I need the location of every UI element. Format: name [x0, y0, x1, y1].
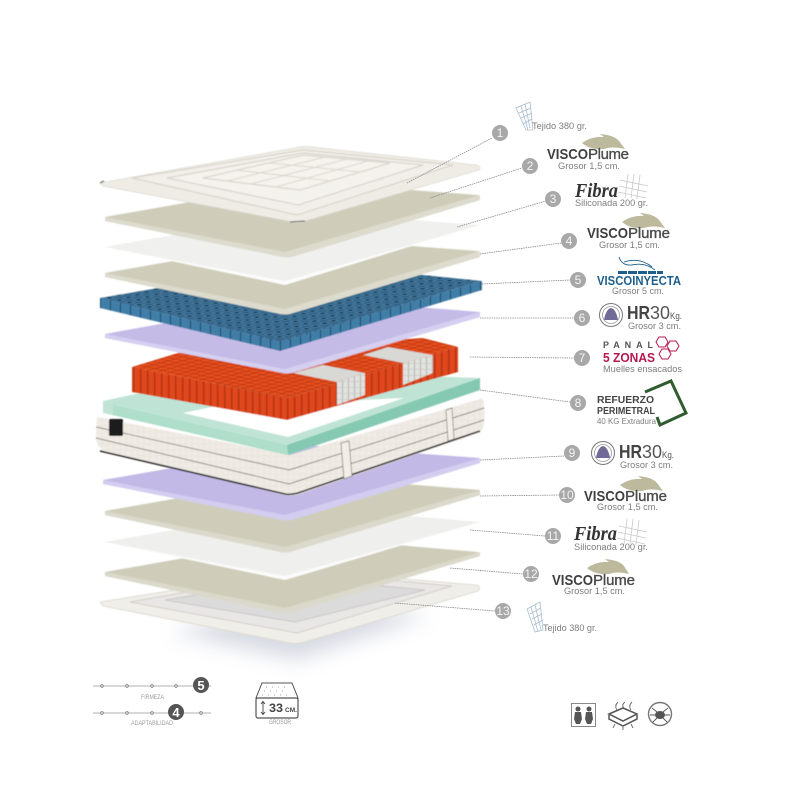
icon: visco injection	[618, 257, 663, 274]
label 3: fibra: Siliconada 200 gr.	[575, 198, 648, 209]
thickness icon: GROSOR	[269, 720, 292, 726]
thickness icon: 33	[269, 701, 283, 715]
label 4: visco plume: Plume	[628, 225, 670, 242]
label 5: visco inyecta: Grosor 5 cm.	[612, 286, 664, 297]
label 8: refuerzo perimetral: REFUERZO	[597, 394, 654, 406]
icon: fabric net	[516, 102, 533, 130]
label 3: fibra	[574, 174, 648, 209]
label 2: visco plume: VISCO	[547, 146, 588, 163]
icon: fibre grid	[618, 174, 648, 199]
label 10: visco plume: VISCO	[584, 488, 625, 505]
label 9: HR foam: Grosor 3 cm.	[620, 460, 673, 471]
icon: fibre grid	[617, 519, 647, 545]
label 13: tejido: Tejido 380 gr.	[543, 623, 597, 634]
label 7: panel 5 zonas: 5 ZONAS	[603, 350, 655, 365]
layer 5: visco injected blue grid	[100, 263, 482, 351]
label 13: tejido	[527, 602, 597, 634]
label 6: HR foam	[600, 303, 682, 332]
icon: perimeter frame	[645, 381, 686, 425]
green foam frame	[103, 372, 480, 455]
mattress body	[96, 398, 485, 496]
label 10: visco plume: Grosor 1,5 cm.	[597, 502, 658, 513]
number badges: 10	[560, 488, 574, 502]
label 9: HR foam: Kg.	[662, 450, 674, 460]
label 1: tejido	[516, 102, 587, 132]
layer 6: HR foam	[105, 298, 480, 374]
label 11: fibra: Siliconada 200 gr.	[574, 542, 648, 553]
mattress layers stack	[96, 146, 485, 660]
adaptability scale	[93, 704, 211, 727]
icon: breathable layer	[609, 702, 637, 730]
icon: anti-mite	[648, 702, 672, 726]
icon: feather	[582, 134, 625, 149]
label 8: refuerzo perimetral	[597, 381, 686, 426]
label 4: visco plume: Grosor 1,5 cm.	[599, 240, 660, 251]
layer 2: visco plume	[105, 182, 480, 258]
label 8: refuerzo perimetral: 40 KG Extradura	[597, 416, 656, 426]
label 7: panel 5 zonas	[603, 337, 682, 375]
icon: feather	[587, 559, 629, 574]
icon: feather	[620, 476, 663, 491]
label 2: visco plume	[547, 134, 629, 172]
number badges: 9	[569, 446, 576, 460]
adaptability scale: 4	[172, 705, 180, 720]
layer 10: visco plume	[105, 476, 480, 552]
icon: feather	[622, 213, 665, 228]
number badges: 11	[547, 529, 560, 543]
number badges: 7	[579, 351, 586, 365]
number badges: 8	[575, 396, 582, 410]
thickness icon: CM.	[285, 707, 297, 714]
number badges: 3	[550, 192, 557, 206]
label 10: visco plume	[584, 476, 667, 513]
layer 3: silicone fibre	[105, 212, 480, 285]
layer 12: visco plume	[105, 537, 480, 614]
firmness scale: FIRMEZA	[141, 695, 164, 701]
leader lines	[395, 138, 574, 611]
layer 7: pocket springs	[132, 338, 458, 420]
label 8: refuerzo perimetral: PERIMETRAL	[597, 405, 655, 417]
label 9: HR foam: HR	[619, 442, 642, 462]
icon: HR circle	[600, 304, 622, 326]
number badges: 4	[566, 234, 573, 248]
label 7: panel 5 zonas: PANAL	[603, 340, 654, 350]
number badges: 5	[575, 273, 582, 287]
layer 13: bottom quilted cover	[100, 570, 480, 660]
adaptability scale: ADAPTABILIDAD	[131, 721, 174, 727]
icon: hexagons	[656, 337, 679, 359]
label 6: HR foam: HR	[627, 303, 650, 323]
label patch	[109, 419, 123, 436]
firmness scale	[93, 677, 211, 701]
label 11: fibra	[573, 519, 648, 553]
number badges: 1	[497, 126, 504, 140]
label 4: visco plume: VISCO	[587, 225, 628, 242]
icon: HR circle	[592, 442, 614, 464]
icon: fabric net	[527, 602, 543, 632]
label 3: fibra: Fibra	[574, 180, 618, 202]
number badges: 2	[527, 159, 534, 173]
thickness icon	[256, 683, 298, 726]
label 4: visco plume	[587, 213, 670, 251]
layer 1: top quilted cover	[100, 146, 480, 222]
label 2: visco plume: Plume	[588, 146, 629, 163]
icon: hygiene people	[572, 704, 596, 726]
number badges: 13	[496, 604, 510, 618]
label 12: visco plume: VISCO	[552, 572, 593, 589]
layer 4: visco plume	[105, 238, 480, 314]
label 6: HR foam: Grosor 3 cm.	[628, 321, 681, 332]
label 12: visco plume: Grosor 1,5 cm.	[564, 586, 625, 597]
label 12: visco plume: Plume	[593, 572, 635, 589]
label 2: visco plume: Grosor 1,5 cm.	[558, 161, 620, 172]
label 11: fibra: Fibra	[573, 523, 617, 545]
label 5: visco inyecta: VISCOINYECTA	[597, 273, 682, 288]
label 9: HR foam: 30	[642, 442, 662, 462]
layer 9: HR foam	[103, 445, 480, 520]
label 9: HR foam	[592, 442, 674, 471]
label 7: panel 5 zonas: Muelles ensacados	[603, 364, 682, 375]
label 6: HR foam: Kg.	[670, 311, 682, 321]
label 10: visco plume: Plume	[625, 488, 667, 505]
layer 8: mattress core with perimeter reinforcement	[96, 372, 485, 496]
label 5: visco inyecta	[597, 257, 682, 297]
layer 11: silicone fibre	[105, 507, 480, 580]
label 6: HR foam: 30	[650, 303, 670, 323]
label 12: visco plume	[552, 559, 635, 597]
label 1: tejido: Tejido 380 gr.	[532, 121, 587, 132]
number badges: 12	[524, 567, 538, 581]
number badges	[492, 125, 590, 619]
firmness scale: 5	[197, 678, 205, 693]
number badges: 6	[579, 311, 586, 325]
